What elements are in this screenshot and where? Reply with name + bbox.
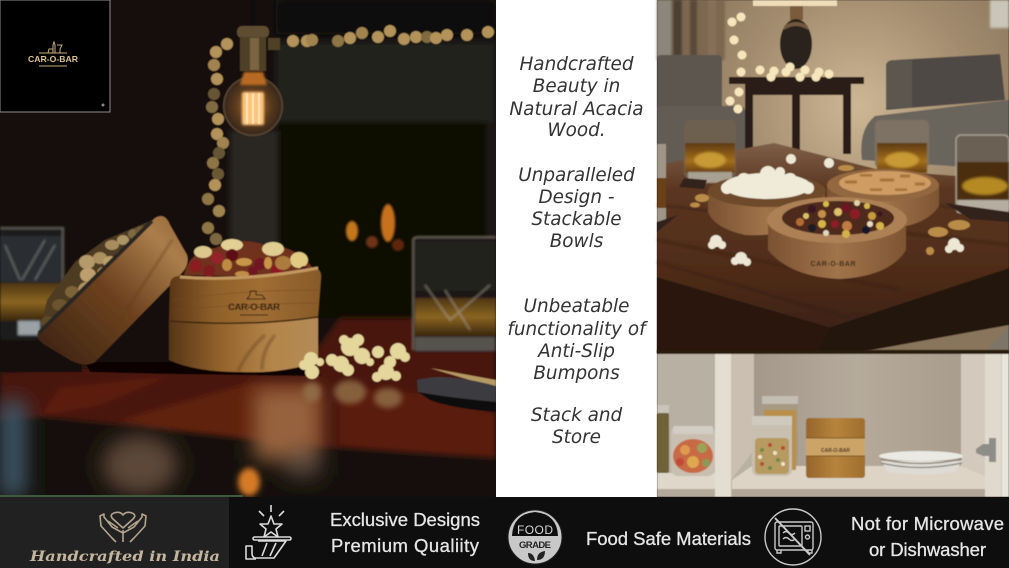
trail mix mound [184,239,312,278]
stacked wooden bowls: CAR-O-BAR [821,448,850,454]
panel: white feature list [496,0,657,497]
popcorn reflections [303,380,402,408]
feature: natural acacia wood: Handcrafted [519,54,634,75]
side table [729,77,864,154]
fire reflection [238,468,260,496]
trail mix bowl [767,197,907,279]
left cabinet upright [715,354,754,497]
cut-off left glass [657,144,666,224]
tilted wooden bowl with nuts [37,216,188,365]
feature: anti-slip bumpons [507,296,648,384]
lower bowl [169,318,318,372]
icon: food grade badge: GRADE [519,540,551,551]
panel: bottom features strip [0,495,1009,568]
polished table top [0,318,496,497]
logo box [0,0,110,112]
left whisky glass [0,228,64,340]
left jars [657,405,715,476]
top shadow edge [657,350,1009,354]
feature: natural acacia wood: Natural Acacia [509,99,644,120]
text: exclusive designs: Exclusive Designs [330,509,480,530]
text: exclusive designs [330,509,480,556]
loose popcorn and peanuts [690,154,970,266]
hanging edison bulb [223,0,283,136]
feature: stackable design: Bowls [550,231,604,252]
room backdrop and fireplace [230,0,500,322]
text: exclusive designs: Premium Qualiity [331,535,480,556]
right whisky glass [956,135,1009,213]
logo wordmark: CAR-O-BAR [28,54,78,64]
feature: natural acacia wood: Beauty in [533,76,620,97]
feature: stackable design: Stackable [531,209,622,230]
stacked wooden bowls with fruit mix [169,239,321,372]
popcorn pile [299,334,410,382]
table lamp [753,0,837,69]
panel: living room table photo [657,0,1009,353]
logo underline [39,65,67,67]
icon: food grade badge: FOOD [517,523,553,537]
curtains and window [657,0,1009,60]
left sofa [657,55,745,164]
feature: natural acacia wood: Wood. [547,120,606,141]
coasters [657,178,1009,232]
right cabinet side and door [961,354,1009,497]
logo emblem [39,42,67,53]
fairy lights [726,12,834,114]
upper bowl [169,268,321,324]
cabinet interior back [753,354,961,466]
folded napkin and knife [417,368,496,412]
text: food safe materials: Food Safe Materials [586,528,751,549]
popcorn bowl [708,166,826,235]
text: not for microwave: Not for Microwave [851,513,1004,534]
feature: stackable design [518,165,635,252]
nuts in tilted bowl [40,222,148,332]
text: not for microwave [851,513,1004,560]
feature: natural acacia wood [509,54,644,141]
icon: food grade badge [508,510,562,564]
panel: left hero photo [0,0,500,497]
right whisky glass [413,237,496,352]
feature: stack and store: Stack and [531,405,622,426]
icon: no microwave [765,509,821,565]
feature: anti-slip bumpons: Anti-Slip [537,341,615,362]
engraved logo text on bowl: CAR-O-BAR [228,302,280,313]
engraved bowl logo: CAR-O-BAR [810,261,856,268]
peanut bowl [827,169,939,229]
icon: hands holding heart [100,512,146,542]
sparkle mark [102,104,104,106]
back left whisky glass [684,120,736,183]
feature: anti-slip bumpons: functionality of [507,319,648,340]
cabinet hinge [976,438,996,462]
feature: stackable design: Unparalleled [518,165,635,186]
string lights [202,25,494,245]
shelf boards [657,466,985,497]
right sofa [861,54,1009,170]
fireplace flames [346,204,404,251]
feature: anti-slip bumpons: Unbeatable [524,296,629,317]
panel: pantry shelf photo [657,350,1009,497]
coffee table [657,143,1009,353]
badge: handcrafted in india [0,495,243,568]
feature: anti-slip bumpons: Bumpons [533,363,620,384]
stacked wooden bowls [806,418,865,478]
icon: star on serving tray [246,505,291,559]
text: not for microwave: or Dishwasher [869,539,986,560]
feature: stack and store: Store [552,427,601,448]
feature: stackable design: Design - [539,187,614,208]
bowl shadow on table [85,362,322,376]
script caption: Handcrafted in India [29,549,220,565]
back centre whisky glass [875,120,929,173]
stacked plates [879,451,963,474]
feature: stack and store [531,405,622,448]
tall jars [752,396,798,476]
